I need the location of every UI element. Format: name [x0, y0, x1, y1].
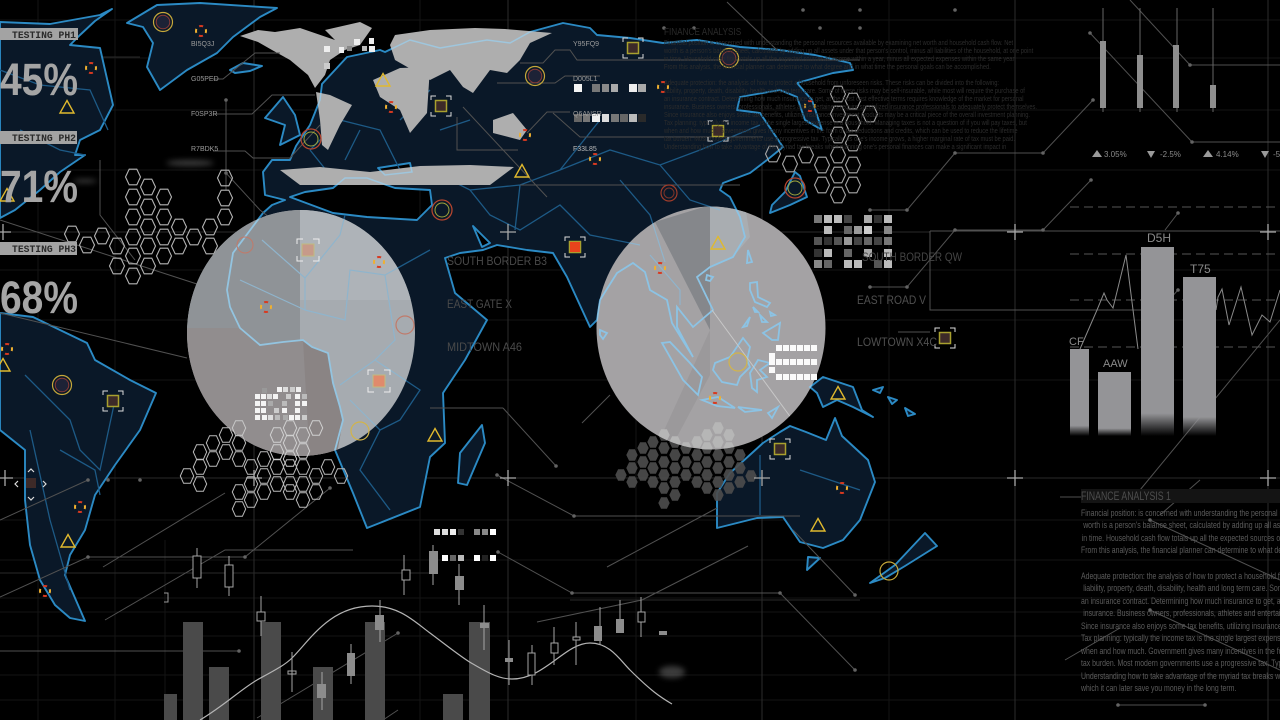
text block: finance analysis top: liability, property, death, disability, health and long term care. Some of these risks may be self-insurable, while most will require the purchase of [664, 88, 1025, 95]
small grey world map [240, 22, 552, 185]
change indicators: -2.5% [1160, 150, 1181, 159]
circle lens: Africa [187, 210, 415, 456]
pixel blocks: top map [324, 38, 375, 69]
text block: finance analysis top: Adequate protection: the analysis of how to protect a household from unforeseen risks. These risks can be divided into the following: [664, 80, 999, 87]
text block: finance analysis right: which it can later save you money in the long term. [1080, 682, 1236, 693]
change indicators: 4.14% [1216, 150, 1239, 159]
small code labels: F0SP3R [191, 111, 217, 118]
phase panel: testing PH3: TESTING PH3 [12, 244, 76, 256]
change indicators [1092, 150, 1280, 159]
text block: finance analysis top: an insurance contract. Determining how much insurance to get, at the most cost effective terms requires knowledge of the market for personal [664, 96, 1024, 103]
phase panel: testing PH2: 71% [0, 161, 78, 212]
text block: finance analysis top: Financial position is concerned with understanding the personal resources available by examining net worth and household cash flow. Net [664, 40, 1013, 47]
hexagon cluster: upper left [64, 169, 232, 284]
phase panel: testing PH3: 68% [0, 272, 78, 323]
small code labels [191, 41, 602, 153]
phase panel: testing PH1: TESTING PH1 [12, 30, 76, 42]
location labels [447, 250, 963, 354]
location labels: EAST GATE X [447, 297, 512, 311]
candlestick columns: top right [1100, 8, 1216, 112]
phase panel: testing PH1 [0, 28, 78, 105]
map markers: bracket squares [103, 38, 955, 459]
text block: finance analysis top: in time. Household cash flow totals up all the expected sources of income within a year, minus all expected expenses within the same year. [664, 56, 1016, 63]
phase panel: testing PH3 [0, 242, 78, 323]
small code labels: G05PED [191, 76, 219, 83]
selector chevrons: South America [15, 469, 46, 500]
text block: finance analysis right [1080, 489, 1280, 693]
map markers: triangles [0, 74, 845, 547]
pixel block: lower centre [434, 529, 496, 561]
bar chart with line overlay: D5H [1147, 231, 1171, 245]
text block: finance analysis right: FINANCE ANALYSIS 1 [1081, 490, 1171, 503]
location labels: MIDTOWN A46 [447, 340, 522, 354]
phase panel: testing PH2: TESTING PH2 [12, 133, 76, 145]
hexagon cluster: upper right [766, 86, 878, 203]
candlesticks [193, 545, 667, 710]
pixel bars: upper centre [574, 84, 646, 122]
small code labels: BI5Q3J [191, 41, 214, 48]
small code labels: F33L85 [573, 146, 597, 153]
text block: finance analysis top: worth is a person's balance sheet, calculated by adding up all assets under that person's control, minus all liabilities of the household, at one point [663, 48, 1033, 55]
location labels: LOWTOWN X4C [857, 335, 937, 349]
location labels: SOUTH BORDER QW [862, 250, 963, 264]
text block: finance analysis top: insurance. Business owners, professionals, athletes and entertainers require specialized insurance professionals to adequately protect themselves. [664, 104, 1037, 111]
small code labels: Y95FQ9 [573, 41, 599, 48]
map markers: rings [52, 12, 898, 580]
text block: finance analysis top: tax burden. Most modern governments use a progressive tax. Typically, as one's income grows, a higher marginal rate of tax must be paid. [664, 136, 1015, 143]
pixel block: right of lens [814, 215, 892, 268]
phase panel: testing PH1: 45% [0, 54, 78, 105]
location labels: EAST ROAD V [857, 293, 926, 307]
pixel block: Asia lens [769, 345, 817, 380]
text block: finance analysis top: From this analysis, the financial planner can determine to what degree and in what time the personal goals can be accomplished. [664, 64, 991, 71]
small code labels: D005L1 [573, 76, 598, 83]
bar chart with line overlay: CF [1069, 336, 1084, 348]
crosshair marks [0, 224, 1276, 486]
wave line [200, 606, 672, 720]
pixel block: Africa lens [255, 387, 307, 420]
phase panel: testing PH2 [0, 131, 78, 212]
change indicators: 3.05% [1104, 150, 1127, 159]
bottom bar chart [164, 622, 490, 720]
stray bracket [164, 593, 168, 602]
circle lens: South-East Asia [596, 206, 826, 450]
bar chart with line overlay: T75 [1190, 262, 1211, 276]
hexagon cluster: filled grey [615, 422, 757, 509]
text block: finance analysis top: Understanding how to take advantage of the myriad tax breaks when planning one's personal finances can make a significant impact in [664, 144, 1007, 151]
hexagon cluster: lower left [180, 421, 348, 516]
map markers: dashed rings [2, 26, 847, 596]
text block: finance analysis top: Since insurance also enjoys some tax benefits, utilizing insurance investment products may be a critical piece of the overall investment planning. [664, 112, 1030, 119]
text block: finance analysis top: FINANCE ANALYSIS [664, 26, 741, 37]
small code labels: R7BDK5 [191, 146, 218, 153]
text block: finance analysis top: Tax planning: typically the income tax is the single largest expense in a household. Managing taxes is not a question of if you will pay taxes, but [664, 120, 1027, 127]
small code labels: Q6ANSR [573, 111, 602, 118]
blurred smudges [73, 160, 685, 678]
world map [0, 3, 937, 621]
text block: finance analysis top [663, 26, 1037, 151]
location labels: SOUTH BORDER B3 [447, 254, 547, 268]
text block: finance analysis top: when and how much. Government gives many incentives in the form of tax deductions and credits, which can be used to reduce the lifetime [663, 128, 1018, 135]
bar chart with line overlay: AAW [1103, 358, 1128, 370]
bar chart with line overlay [1069, 207, 1280, 436]
